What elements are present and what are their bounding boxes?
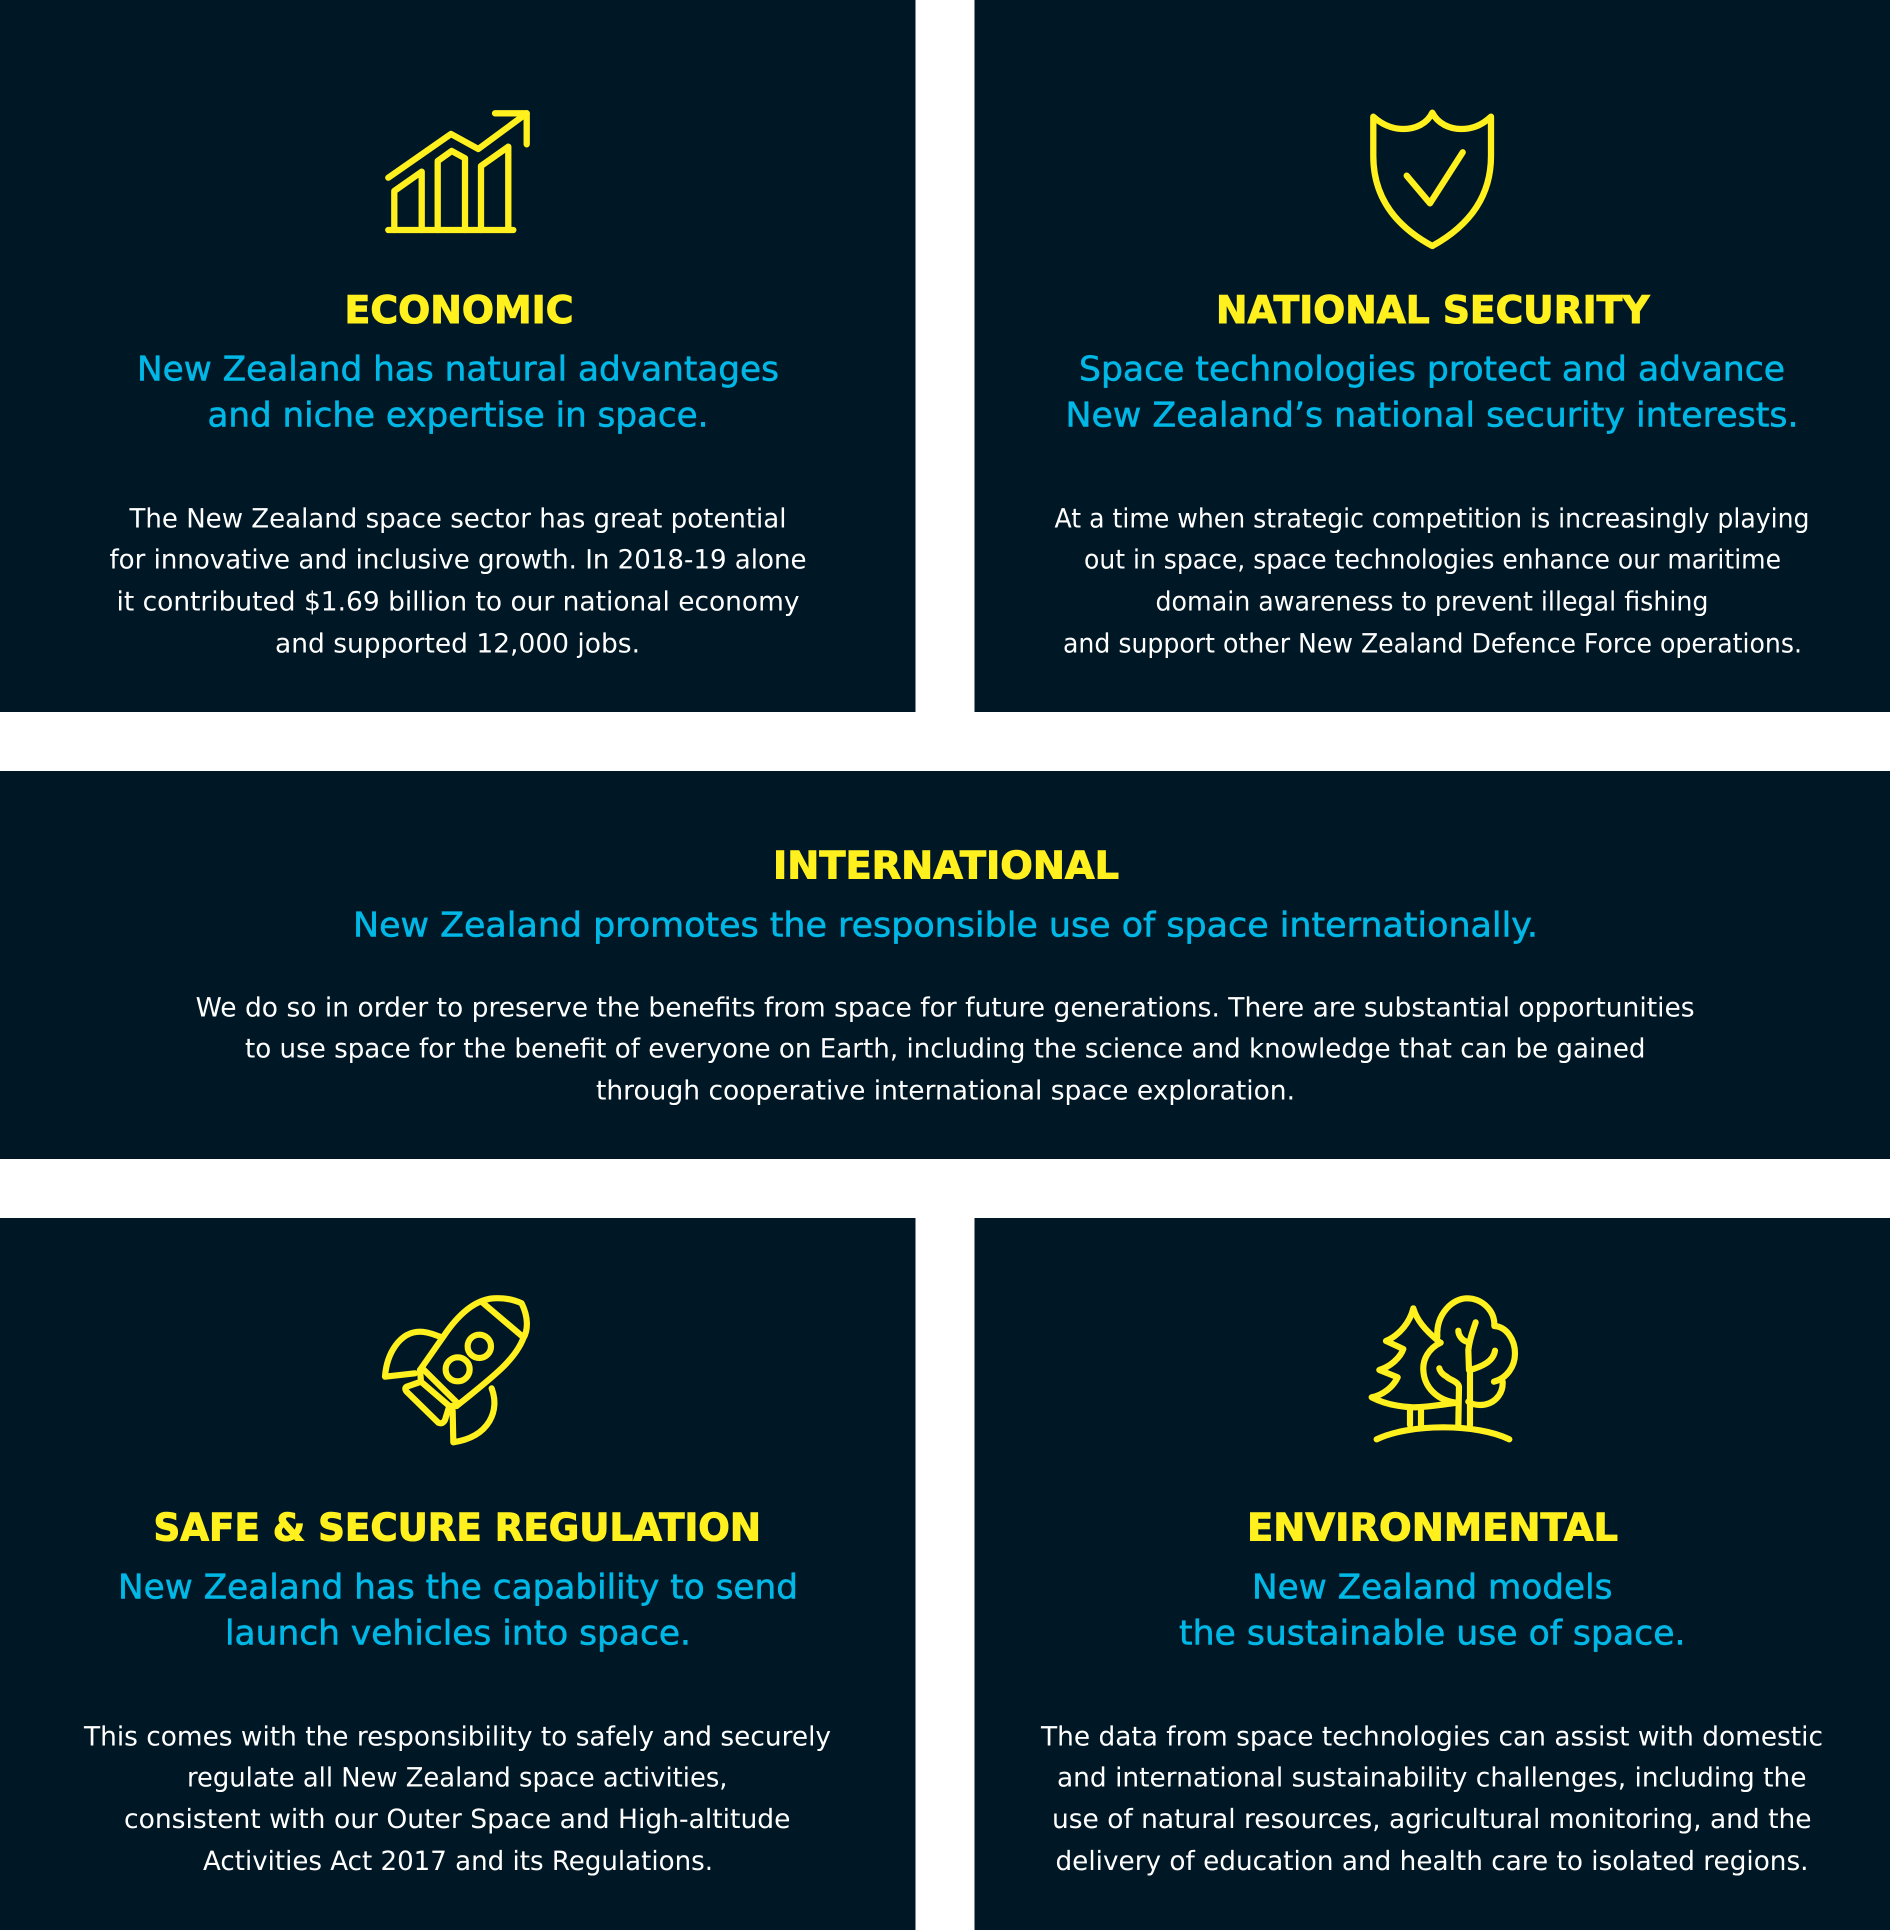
body text: international bbox=[196, 993, 1695, 1106]
body text: national security: out in space, space technologies enhance our maritime bbox=[1084, 544, 1781, 576]
body text: environmental: and international sustainability challenges, including the bbox=[1057, 1763, 1806, 1794]
icon: shield with check mark bbox=[1373, 113, 1491, 246]
panel: national security bbox=[974, 0, 1890, 712]
icon: rising bar chart bbox=[388, 113, 527, 230]
body text: international: to use space for the benefit of everyone on Earth, including the science and knowledge that can be gained bbox=[245, 1034, 1646, 1065]
heading: national security: NATIONAL SECURITY bbox=[1216, 288, 1650, 332]
body text: economic: The New Zealand space sector has great potential bbox=[129, 504, 787, 535]
heading: international: INTERNATIONAL bbox=[773, 844, 1119, 888]
panel: economic bbox=[0, 0, 916, 712]
body text: international: through cooperative international space exploration. bbox=[596, 1076, 1295, 1106]
body text: international: We do so in order to preserve the benefits from space for future generations. There are substantial opportunities bbox=[196, 993, 1695, 1024]
heading: economic: ECONOMIC bbox=[344, 288, 574, 332]
body text: economic bbox=[110, 504, 806, 660]
subheading: safe and secure regulation bbox=[118, 1567, 798, 1653]
panel: international bbox=[0, 771, 1890, 1159]
subheading: safe and secure regulation: New Zealand has the capability to send bbox=[118, 1567, 798, 1607]
body text: environmental: The data from space technologies can assist with domestic bbox=[1040, 1722, 1823, 1753]
body text: economic: it contributed $1.69 billion to our national economy bbox=[116, 587, 800, 618]
body text: environmental: delivery of education and health care to isolated regions. bbox=[1056, 1846, 1808, 1877]
subheading: national security: New Zealand’s national security interests. bbox=[1066, 396, 1798, 436]
heading: environmental: ENVIRONMENTAL bbox=[1247, 1506, 1618, 1550]
subheading: economic bbox=[137, 350, 779, 436]
subheading: international: New Zealand promotes the responsible use of space internationally. bbox=[353, 906, 1538, 946]
icon: trees on a hill bbox=[1372, 1298, 1515, 1439]
body text: environmental: use of natural resources, agricultural monitoring, and the bbox=[1052, 1804, 1812, 1835]
body text: environmental bbox=[1040, 1722, 1823, 1877]
subheading: environmental: the sustainable use of space. bbox=[1179, 1613, 1686, 1653]
icon: rocket bbox=[385, 1298, 527, 1442]
subheading: safe and secure regulation: launch vehicles into space. bbox=[225, 1613, 691, 1653]
subheading: economic: New Zealand has natural advantages bbox=[137, 350, 779, 390]
body text: national security bbox=[1054, 504, 1810, 660]
body text: safe and secure regulation: regulate all New Zealand space activities, bbox=[187, 1763, 728, 1794]
body text: safe and secure regulation: consistent with our Outer Space and High-altitude bbox=[124, 1804, 791, 1835]
body text: economic: and supported 12,000 jobs. bbox=[275, 628, 640, 660]
subheading: environmental bbox=[1179, 1567, 1686, 1653]
subheading: environmental: New Zealand models bbox=[1252, 1567, 1612, 1607]
body text: safe and secure regulation: This comes with the responsibility to safely and securely bbox=[83, 1722, 831, 1753]
body text: national security: At a time when strategic competition is increasingly playing bbox=[1054, 504, 1810, 535]
subheading: national security: Space technologies protect and advance bbox=[1079, 350, 1785, 390]
body text: national security: and support other New Zealand Defence Force operations. bbox=[1063, 628, 1802, 660]
body text: national security: domain awareness to prevent illegal fishing bbox=[1156, 587, 1708, 618]
subheading: national security bbox=[1066, 350, 1798, 436]
body text: safe and secure regulation: Activities Act 2017 and its Regulations. bbox=[203, 1846, 713, 1877]
panel: safe and secure regulation bbox=[0, 1218, 916, 1930]
panel: environmental bbox=[974, 1218, 1890, 1930]
body text: economic: for innovative and inclusive growth. In 2018-19 alone bbox=[110, 544, 806, 576]
subheading: economic: and niche expertise in space. bbox=[208, 396, 708, 436]
body text: safe and secure regulation bbox=[83, 1722, 831, 1877]
heading: safe and secure regulation: SAFE & SECURE REGULATION bbox=[154, 1506, 761, 1550]
